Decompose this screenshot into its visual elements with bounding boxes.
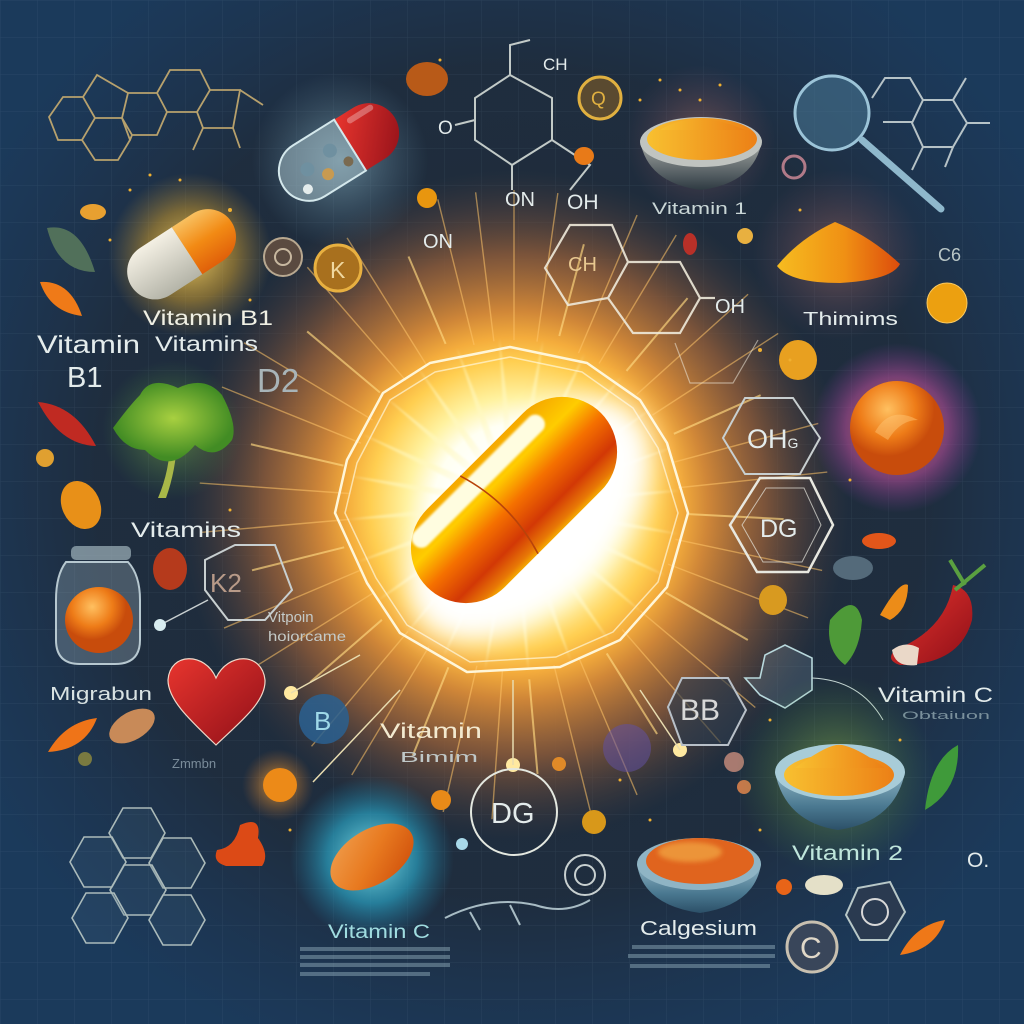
hexagon K2: K2 [210,568,242,598]
icon: green leaf tree [102,360,242,500]
icon circles near capsule [264,238,361,291]
red splat [216,822,265,866]
small text lines [300,945,775,976]
label: O: O [438,118,453,139]
chem structure center right [545,225,758,383]
label: calcium: Calgesium [640,918,757,940]
label: vitamin c right: Vitamin C [878,684,993,707]
hexagon OH [723,398,820,474]
label: o: O. [967,849,989,872]
sparkle dots [108,58,902,832]
label: vitamin b1: Vitamin B1 [143,307,273,330]
magnifying glass [795,76,941,209]
B badge [299,694,349,744]
dg circle [471,769,557,855]
label: b small: Bimim [400,749,478,766]
label: vitamin b center: Vitamin [380,720,482,743]
orange bean centre right [779,340,817,380]
label: C6: C6 [938,245,961,265]
label: OH right: OH [715,296,745,318]
icon: brown nugget [406,62,448,96]
central glow and rays [179,170,849,840]
small orange dots [417,147,753,255]
label: ON: ON [505,189,535,211]
label: vitamin 1: Vitamin 1 [652,199,747,218]
bottom left hexagon cluster [70,808,205,945]
icon: red and clear capsule [252,72,428,248]
small z text: Zmmbn [172,756,216,771]
label: CH top: CH [543,55,568,74]
bb hexagon [668,678,746,745]
label: d2: D2 [257,362,299,399]
label: b1: B1 [67,362,102,394]
glowing sphere [812,343,982,513]
bb hexagon: BB [680,694,720,727]
left leaves and foods [36,204,109,536]
left capsule yellow [108,173,272,337]
hexagon DG: DG [760,515,798,543]
bottom right icons: C [800,932,822,965]
label: thimims: Thimims [803,309,898,329]
right foods [759,533,985,665]
dg circle: DG [491,798,534,830]
top left hexagon network [49,70,263,160]
bottom right icons [787,882,945,972]
icon: round Q badge: Q [591,89,606,110]
label: CH: CH [568,254,597,276]
ring around capsule [335,347,688,672]
bowl: vitamin 1 [625,65,775,215]
fish [445,900,590,930]
icon: nut [153,548,187,590]
small dots bottom [431,724,843,895]
main capsule [364,354,696,686]
label: vitamin 2: Vitamin 2 [792,842,903,865]
icon: round Q badge [579,77,621,119]
right small text: Obtaiuon [902,710,990,722]
bowl: calcium [637,838,761,913]
heart [168,659,265,745]
label: vitamin hormone: hoiorcame [268,628,346,644]
label: OH: OH [567,191,598,214]
hexagon DG [730,478,833,572]
line nodes [284,686,687,772]
top right hexagons [872,78,990,170]
label: OHG: OHG [747,424,798,454]
chemical structure top [455,40,590,190]
label: vitamin vitamins: Vitamin [37,331,140,359]
orange powder pile [753,170,923,340]
label: vitamins: Vitamins [131,519,241,542]
label: vitamin c bottom: Vitamin C [328,922,430,943]
label: vitamin vitamins [37,331,258,359]
cyan glow tablet [290,776,454,940]
icon circles near capsule: K [330,257,346,283]
label: migrabun: Migrabun [50,684,152,704]
jar [56,546,140,664]
B badge: B [314,706,331,736]
glowing orange dot [242,749,314,821]
label: ON left: ON [423,231,453,253]
icon: spiral [783,156,805,178]
label: vitamin vitamins: Vitamins [155,333,258,356]
foods bottom left [48,701,161,766]
circle C icon [565,855,605,895]
label: vitamin hormone: Vitpoin [268,609,314,626]
glass hex [745,645,883,720]
yellow-green bowl [735,675,958,875]
orange glossy dot [927,283,967,323]
hexagon K2 [154,545,292,631]
